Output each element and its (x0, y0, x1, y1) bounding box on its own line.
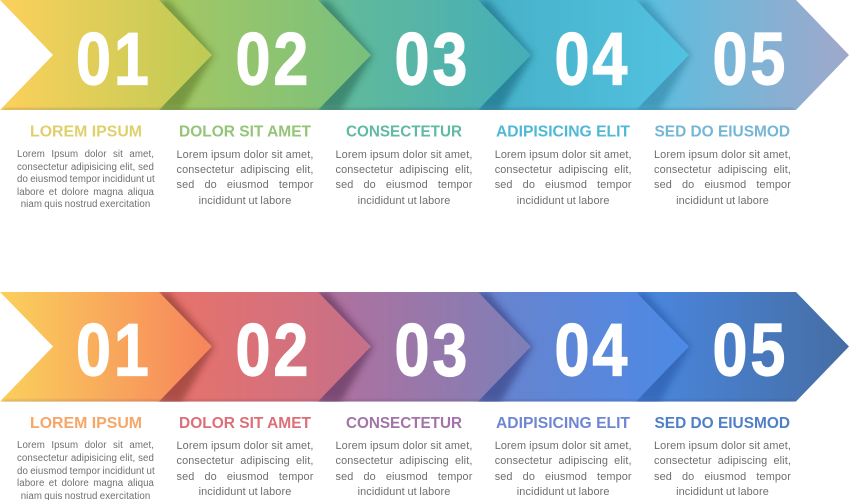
text block: bottom 2: sed do eiusmod tempor (176, 471, 314, 483)
bottom row numbers: 05 (712, 309, 788, 392)
top arrow segment 5 (636, 0, 849, 110)
text block: bottom 3: sed do eiusmod tempor (336, 471, 472, 483)
top row numbers: 04 (554, 18, 630, 101)
text block: bottom 4: sed do eiusmod tempor (495, 471, 632, 483)
bottom arrow segment 1 (0, 292, 214, 402)
text block: bottom 3 (336, 440, 472, 498)
text block: bottom 1: consectetur adipisicing elit, sed (17, 453, 154, 464)
text block: bottom 1: Lorem Ipsum dolor sit amet, (17, 440, 154, 451)
bottom row headings: DOLOR SIT AMET (179, 415, 311, 432)
text block: bottom 4: consectetur adipiscing elit, (495, 455, 632, 467)
text block: bottom 5: sed do eiusmod tempor (654, 471, 791, 483)
text block: top 2: sed do eiusmod tempor (176, 179, 314, 191)
text block: bottom 3: incididunt ut labore (358, 486, 450, 498)
text block: bottom 2: incididunt ut labore (199, 486, 291, 498)
text block: bottom 1 (17, 440, 155, 500)
text block: top 2: Lorem ipsum dolor sit amet, (176, 148, 314, 160)
text block: top 1: labore et dolore magna aliqua (17, 187, 154, 198)
bottom row headings (30, 415, 790, 432)
bottom row headings: CONSECTETUR (346, 415, 462, 432)
text block: top 1: niam quis nostrud exercitation (21, 199, 150, 210)
top row bottom shade (2, 108, 795, 110)
top arrow segment 4 (478, 0, 691, 110)
top row headings (30, 124, 790, 141)
top row numbers: 03 (394, 18, 470, 101)
bottom row numbers: 02 (236, 309, 311, 392)
top row headings: DOLOR SIT AMET (179, 124, 311, 141)
text block: bottom 1: do eiusmod tempor incididunt ut (17, 466, 155, 477)
text block: bottom 3: Lorem ipsum dolor sit amet, (336, 440, 472, 452)
top arrow segment 3 (318, 0, 533, 110)
top row numbers (76, 18, 788, 101)
bottom row numbers: 04 (554, 309, 630, 392)
bottom arrow row (0, 292, 849, 402)
text block: bottom 1: labore et dolore magna aliqua (17, 478, 154, 489)
text block: top 5: Lorem ipsum dolor sit amet, (654, 148, 791, 160)
text block: bottom 5: incididunt ut labore (676, 486, 769, 498)
text block: top 4: Lorem ipsum dolor sit amet, (495, 148, 632, 160)
top row headings: LOREM IPSUM (30, 124, 142, 141)
text block: top 3 (336, 148, 472, 207)
text block: top 5: incididunt ut labore (676, 195, 769, 207)
text block: top 5 (654, 148, 791, 207)
text block: top 1: do eiusmod tempor incididunt ut (17, 174, 155, 185)
text block: top 2: incididunt ut labore (199, 195, 291, 207)
text block: top 3: incididunt ut labore (358, 195, 450, 207)
top row numbers: 05 (712, 18, 788, 101)
text block: bottom 4: Lorem ipsum dolor sit amet, (495, 440, 632, 452)
text block: top 3: consectetur adipiscing elit, (336, 164, 472, 176)
top arrow segment 1 (0, 0, 214, 110)
top row numbers: 02 (236, 18, 311, 101)
text block: bottom 2: consectetur adipiscing elit, (176, 455, 314, 467)
bottom row numbers: 03 (394, 309, 470, 392)
text block: bottom 3: consectetur adipiscing elit, (336, 455, 472, 467)
text block: top 4: sed do eiusmod tempor (495, 179, 632, 191)
text block: top 2 (176, 148, 314, 207)
bottom row headings: LOREM IPSUM (30, 415, 142, 432)
bottom arrow segment 2 (159, 292, 373, 402)
bottom row numbers (76, 309, 788, 392)
text block: bottom 5: Lorem ipsum dolor sit amet, (654, 440, 791, 452)
text block: bottom 4 (495, 440, 632, 498)
top row headings: ADIPISICING ELIT (496, 124, 630, 141)
bottom row numbers: 01 (76, 309, 152, 392)
bottom arrow segment 4 (478, 292, 691, 402)
bottom row headings: ADIPISICING ELIT (496, 415, 630, 432)
top arrow segment 2 (159, 0, 373, 110)
top row numbers: 01 (76, 18, 152, 101)
bottom row headings: SED DO EIUSMOD (654, 415, 790, 432)
text block: top 1 (17, 149, 155, 210)
text block: top 5: sed do eiusmod tempor (654, 179, 791, 191)
text block: top 3: sed do eiusmod tempor (336, 179, 472, 191)
text block: top 1: consectetur adipisicing elit, sed (17, 162, 154, 173)
text block: bottom 5: consectetur adipiscing elit, (654, 455, 791, 467)
top row headings: CONSECTETUR (346, 124, 462, 141)
text block: bottom 5 (654, 440, 791, 498)
text block: top 4: consectetur adipiscing elit, (495, 164, 632, 176)
bottom arrow segment 3 (318, 292, 533, 402)
text block: bottom 2: Lorem ipsum dolor sit amet, (176, 440, 314, 452)
bottom row bottom shade (2, 400, 795, 402)
text block: bottom 2 (176, 440, 314, 498)
text block: top 2: consectetur adipiscing elit, (176, 164, 314, 176)
bottom arrow segment 5 (636, 292, 849, 402)
text block: top 4: incididunt ut labore (517, 195, 610, 207)
top arrow row (0, 0, 849, 110)
text block: bottom 4: incididunt ut labore (517, 486, 610, 498)
top row headings: SED DO EIUSMOD (654, 124, 790, 141)
text block: top 5: consectetur adipiscing elit, (654, 164, 791, 176)
text block: top 1: Lorem Ipsum dolor sit amet, (17, 149, 154, 160)
text block: top 3: Lorem ipsum dolor sit amet, (336, 148, 472, 160)
text block: top 4 (495, 148, 632, 207)
